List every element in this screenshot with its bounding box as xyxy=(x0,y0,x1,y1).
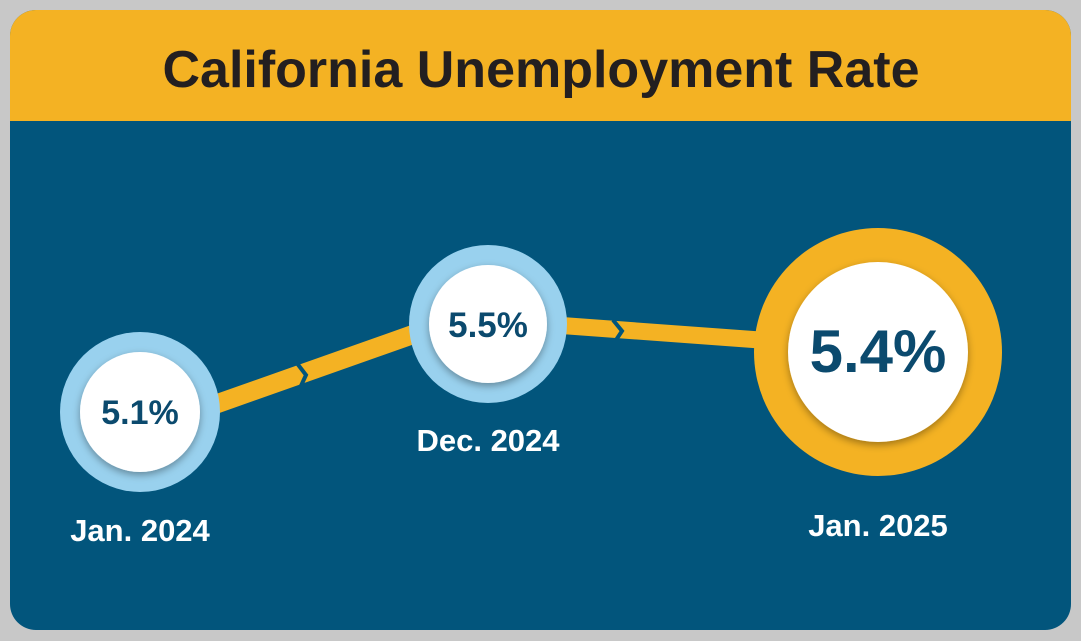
circle: Jan 2025: 5.4% xyxy=(810,318,946,385)
circle: Dec 2024 xyxy=(409,245,567,403)
circle: Dec 2024: 5.5% xyxy=(448,306,528,345)
arrow: Dec 2024 to Jan 2025 xyxy=(555,320,760,343)
title: California Unemployment Rate xyxy=(162,41,920,99)
header bar xyxy=(10,10,1071,121)
circle: Jan 2025 xyxy=(754,228,1002,476)
label: Jan 2024: Jan. 2024 xyxy=(70,513,211,548)
circle: Jan 2024: 5.1% xyxy=(101,394,179,432)
label: Jan 2025: Jan. 2025 xyxy=(808,508,948,543)
circle: Jan 2024 xyxy=(60,332,220,492)
arrow: Jan 2024 to Dec 2024 xyxy=(205,332,420,408)
label: Dec 2024: Dec. 2024 xyxy=(416,423,560,458)
